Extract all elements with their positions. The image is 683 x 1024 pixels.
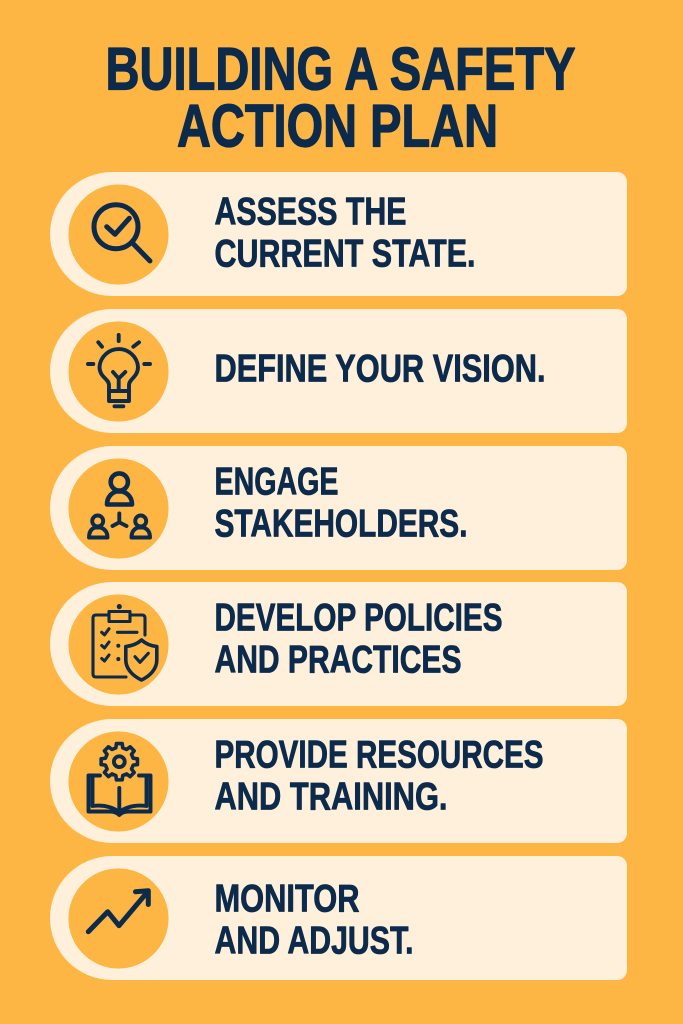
icon: people network (89, 473, 150, 538)
step 3 text (214, 460, 468, 546)
step 6 text: AND ADJUST. (214, 920, 414, 962)
step 3 text: STAKEHOLDERS. (214, 502, 468, 546)
panel: step 3 engage stakeholders (50, 446, 627, 570)
step 4 text: AND PRACTICES (214, 638, 462, 682)
panel: step 4 develop policies and practices (50, 582, 627, 706)
step 4 text (214, 596, 502, 682)
step 5 text: PROVIDE RESOURCES (214, 734, 544, 776)
icon: magnifying glass with check (94, 205, 150, 261)
step 1 text: CURRENT STATE. (214, 232, 476, 276)
step 4 text: DEVELOP POLICIES (214, 596, 502, 640)
panel: step 5 provide resources and training (50, 719, 627, 843)
icon: clipboard and shield (93, 606, 157, 680)
icon: rising trend arrow (88, 891, 148, 932)
step 1 text (214, 190, 476, 276)
title (106, 36, 576, 160)
step 1 text: ASSESS THE (214, 190, 406, 234)
panel: step 6 monitor and adjust (50, 856, 627, 980)
title: ACTION PLAN (177, 92, 498, 160)
step 5 text: AND TRAINING. (214, 776, 448, 818)
step 6 text: MONITOR (214, 878, 360, 920)
step 5 text (214, 734, 544, 818)
icon: gear over open book (88, 744, 150, 815)
panel: step 1 assess the current state (50, 172, 627, 296)
panel: step 2 define your vision (50, 309, 627, 433)
step 3 text: ENGAGE (214, 460, 338, 504)
icon: light bulb (88, 335, 150, 406)
step 6 text (214, 878, 414, 962)
step 2 text: DEFINE YOUR VISION. (214, 348, 546, 390)
